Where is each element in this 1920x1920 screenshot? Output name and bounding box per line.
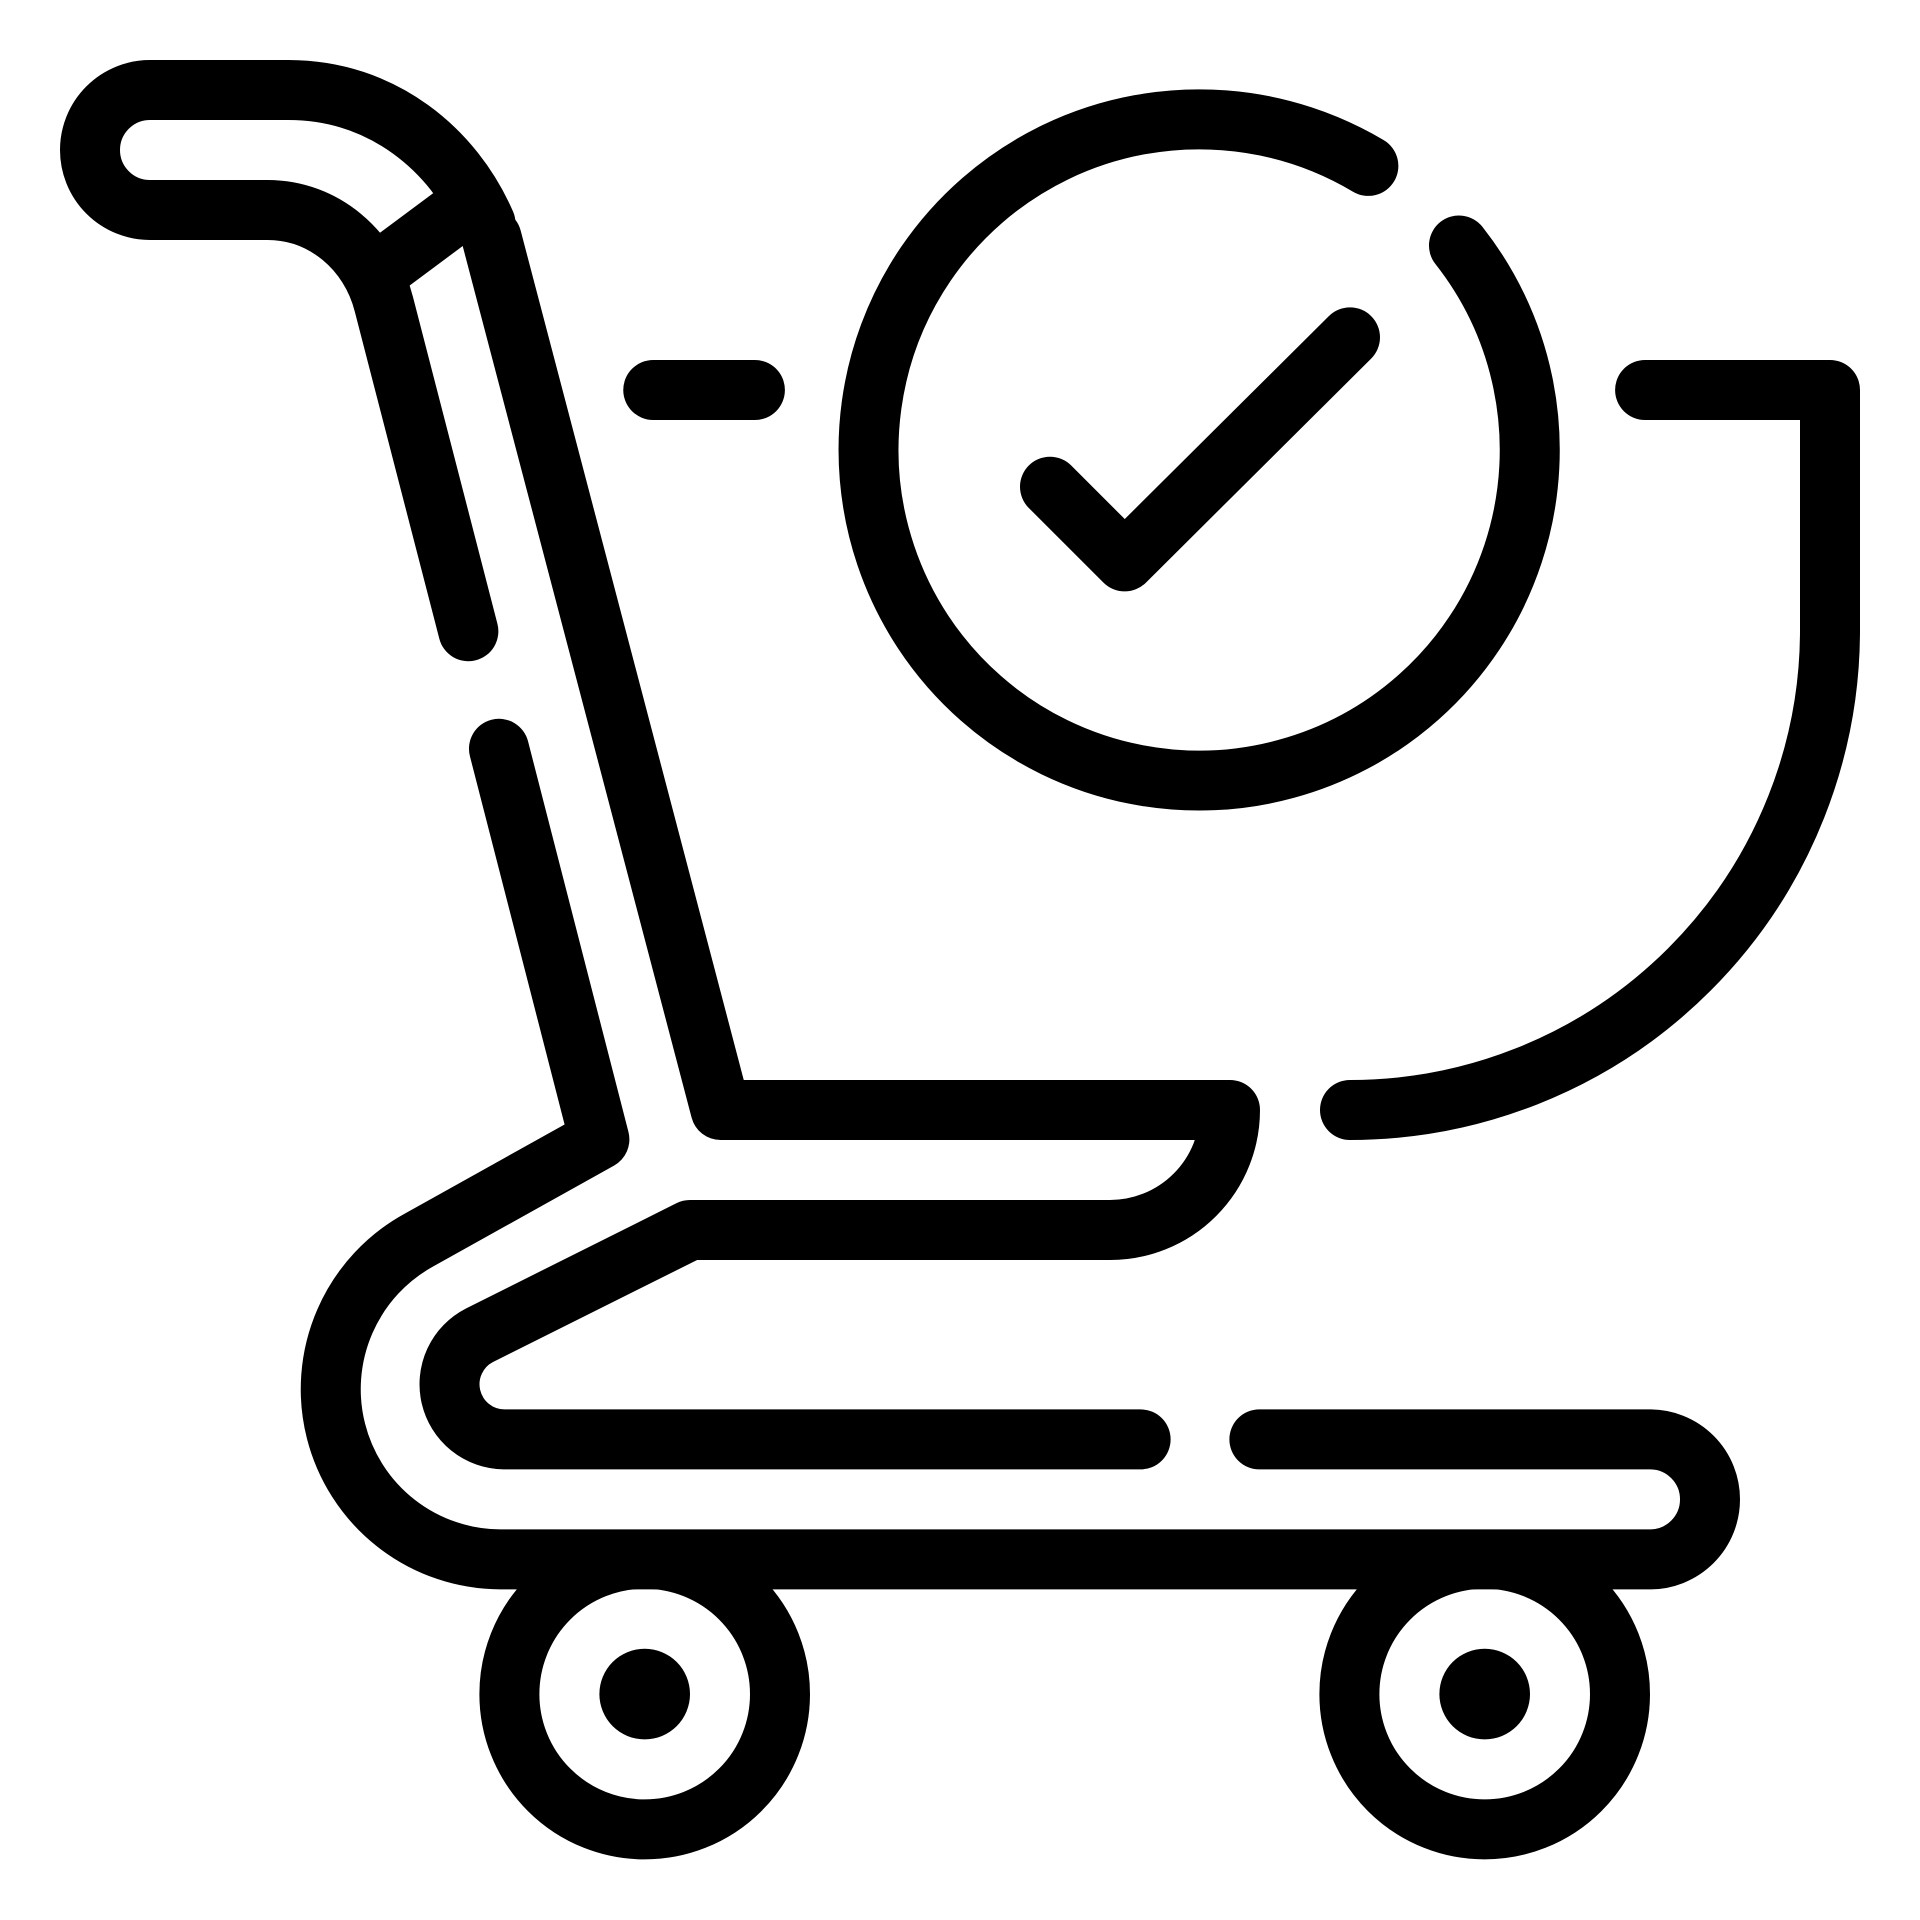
icon: front wheel hub <box>599 1649 690 1739</box>
check mark <box>1050 337 1350 561</box>
icon: front wheel <box>509 1559 780 1829</box>
check circle <box>869 119 1530 781</box>
cart handle grip <box>90 90 486 631</box>
dash line <box>653 366 755 414</box>
icon: rear wheel <box>1349 1559 1620 1829</box>
cart back and upper deck <box>450 238 1230 1439</box>
cart handle collar <box>375 199 476 274</box>
return arrow curve <box>1350 390 1830 1110</box>
cart lower frame <box>331 749 1710 1559</box>
icon: rear wheel hub <box>1439 1649 1530 1739</box>
